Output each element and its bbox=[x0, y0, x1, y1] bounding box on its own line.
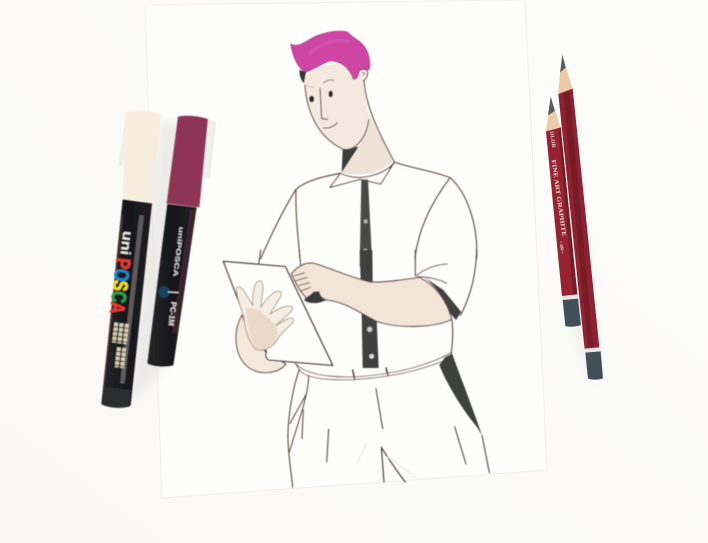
hair bbox=[291, 31, 370, 79]
fingers right hand bbox=[294, 273, 311, 291]
spec marks bbox=[114, 323, 127, 368]
body bbox=[546, 127, 577, 297]
pencils bbox=[546, 55, 603, 380]
ferrule end bbox=[563, 299, 581, 327]
white band bbox=[562, 294, 578, 301]
palm shade bbox=[246, 308, 278, 350]
armhole right bbox=[415, 179, 449, 259]
neck bbox=[342, 110, 393, 175]
nose bbox=[320, 88, 327, 119]
marker shadow bbox=[128, 120, 205, 405]
pencil scribble bbox=[357, 443, 416, 477]
paper sheet bbox=[145, 0, 547, 498]
brand text POSCA: P bbox=[111, 257, 135, 270]
crotch bbox=[381, 447, 405, 482]
markers bbox=[101, 111, 215, 408]
button 2 bbox=[363, 249, 367, 253]
ferrule end bbox=[585, 351, 603, 380]
pencil back bbox=[558, 55, 603, 380]
tip bbox=[548, 97, 555, 115]
sleeve top lines bbox=[417, 264, 447, 283]
button 4 bbox=[369, 354, 374, 359]
button 1 bbox=[364, 219, 368, 223]
button 3 bbox=[367, 327, 372, 332]
ear bbox=[359, 69, 368, 81]
brand text POSCA: A bbox=[105, 301, 130, 315]
marker: white POSCA bbox=[101, 111, 161, 408]
left leg outline bbox=[288, 369, 299, 487]
illustration: man with tablet bbox=[223, 31, 489, 487]
model text: PC-1M bbox=[166, 301, 178, 326]
figure upper body bbox=[261, 31, 477, 267]
eye right bbox=[328, 91, 333, 97]
marker: burgundy bbox=[147, 116, 215, 366]
shoulder line right bbox=[394, 162, 477, 259]
tip bbox=[560, 55, 566, 73]
clear clip white bbox=[118, 113, 130, 167]
figure lower body bbox=[223, 250, 489, 487]
mouth bbox=[323, 123, 337, 128]
cap burgundy bbox=[167, 116, 208, 207]
face outline bbox=[305, 85, 369, 149]
dark pen bbox=[304, 291, 327, 303]
brand text POSCA: S bbox=[108, 279, 133, 293]
body facet bbox=[559, 127, 577, 295]
forearm bbox=[291, 263, 452, 326]
eyebrow left bbox=[307, 86, 313, 88]
face bbox=[304, 64, 369, 150]
belt bbox=[295, 352, 452, 380]
arm behind bbox=[236, 315, 286, 373]
lettering brand: OLOR bbox=[548, 131, 556, 148]
eyebrow right bbox=[323, 80, 334, 83]
brand text POSCA: C bbox=[107, 290, 131, 304]
dark side shape bbox=[439, 353, 482, 435]
back of neck line bbox=[364, 80, 394, 161]
collar bbox=[330, 163, 394, 187]
body facet bbox=[563, 91, 593, 347]
waist right bbox=[451, 320, 453, 351]
right leg outline bbox=[482, 435, 489, 473]
placket lower bbox=[360, 250, 379, 368]
hand on tablet bbox=[236, 281, 294, 350]
barrel edge red line bbox=[103, 215, 123, 383]
lettering name: FINE ART GRAPHITE bbox=[550, 159, 566, 237]
wood bbox=[558, 67, 573, 94]
hair highlight bbox=[310, 41, 348, 53]
barrel base bbox=[101, 387, 131, 408]
brand text POSCA bbox=[105, 257, 135, 315]
brand text: uniPOSCA bbox=[171, 226, 184, 278]
brand text uni: uni bbox=[117, 230, 136, 256]
clear clip bbox=[203, 120, 215, 177]
tablet bbox=[223, 261, 333, 365]
barrel bbox=[101, 199, 152, 408]
lettering grade: • 160 • bbox=[559, 241, 565, 254]
cap cream bbox=[123, 111, 161, 202]
placket upper bbox=[360, 179, 372, 267]
dark sideburn bbox=[299, 70, 306, 83]
neck undershirt dark bbox=[342, 147, 359, 173]
crease lines bbox=[327, 389, 466, 464]
pencil shadow bbox=[560, 140, 600, 380]
white band bbox=[585, 347, 600, 353]
brand text POSCA: O bbox=[109, 268, 134, 283]
armhole left bbox=[296, 190, 300, 259]
barrel stripe bbox=[120, 215, 144, 383]
eye left bbox=[309, 96, 314, 102]
body bbox=[558, 89, 599, 349]
pencil front bbox=[546, 97, 581, 327]
sleeve cuff dark bbox=[423, 277, 461, 320]
dot mark bbox=[168, 290, 179, 294]
barrel stripe bbox=[172, 210, 196, 333]
pocket lines bbox=[289, 375, 309, 452]
wood bbox=[546, 111, 561, 131]
shoulder line left bbox=[261, 173, 340, 259]
dot bbox=[158, 286, 170, 298]
sleeve lines bbox=[259, 250, 477, 315]
belt loops bbox=[353, 368, 388, 379]
barrel bbox=[147, 204, 197, 366]
